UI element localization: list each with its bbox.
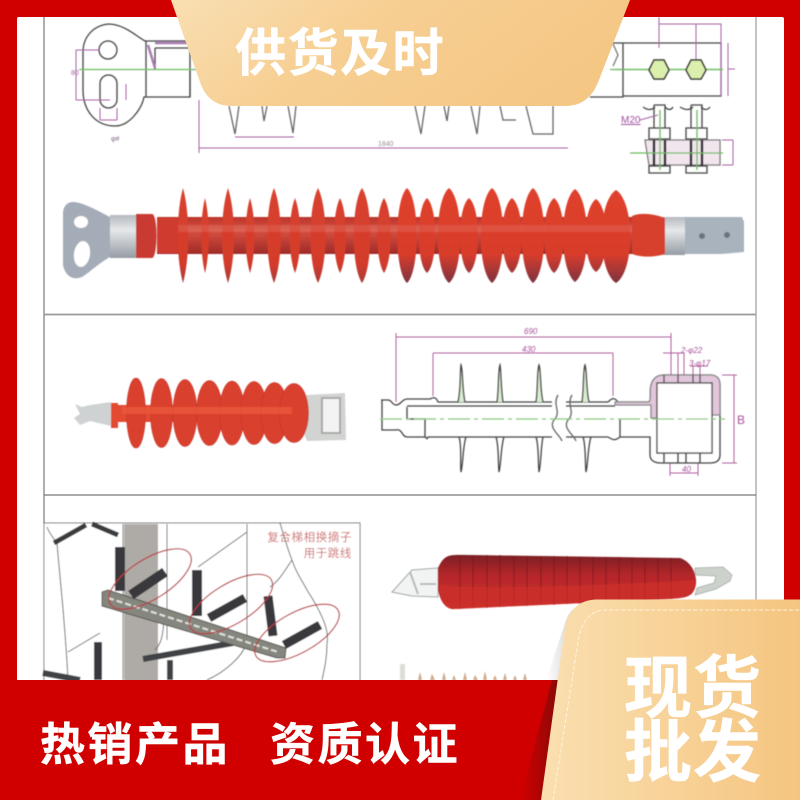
right tab (682, 217, 744, 254)
badge heading line 1: 现货 (624, 633, 762, 732)
corner badge: spot wholesale (541, 600, 800, 800)
rounded sheds, right half (397, 188, 630, 283)
dimension labels: 3-φ17 (689, 359, 711, 368)
technical drawing: middle insulator (380, 327, 745, 476)
footer heading: certification: 资质认证 (270, 708, 460, 773)
partial product photo: tan shed tips (400, 664, 527, 680)
cross arm (102, 590, 286, 658)
red highlight ellipses (100, 537, 348, 673)
drawing: bolt section M20 (621, 105, 733, 173)
photo caption: 用于跳线 (304, 546, 352, 560)
application photo: insulators on pole (43, 523, 360, 688)
footer heading: hot products: 热销产品 (40, 708, 230, 773)
band shadow beside badge (520, 680, 562, 800)
drawing: bolt section M20: M20 (621, 115, 641, 126)
technical drawing: top insulator: φ# (111, 136, 120, 143)
badge drop shadow (546, 606, 590, 680)
technical drawing: top insulator (71, 17, 735, 173)
photo frame (44, 523, 360, 688)
badge heading line 2: 批发 (624, 697, 762, 796)
upper brace (54, 524, 118, 543)
left fitting (74, 402, 111, 426)
insulators (98, 547, 320, 680)
core rod (111, 403, 290, 428)
ribbon heading: 供货及时 (235, 12, 445, 86)
green centre line (380, 418, 725, 420)
drawing: lower shed tips (229, 106, 553, 134)
dimension lines (396, 333, 737, 476)
core highlight (157, 225, 632, 232)
bottom red band (0, 680, 570, 800)
panel rules: sheet grid lines (44, 17, 756, 600)
end collars (136, 214, 156, 258)
cross arm lattice (108, 598, 278, 652)
dimension labels: 690 (524, 327, 538, 336)
right fitting (695, 567, 732, 595)
badge stitching (553, 610, 800, 800)
dimension labels: 2-φ22 (680, 346, 703, 355)
dimension labels: 430 (522, 345, 536, 354)
ribbed body (438, 555, 696, 609)
photo caption: 复合梯相换摘子 (267, 530, 352, 544)
ribs (460, 555, 671, 609)
right fitting (300, 393, 346, 441)
drawing: eye fitting (83, 24, 190, 126)
wires (47, 523, 328, 680)
lower braces (43, 643, 233, 680)
right red edge (784, 17, 800, 680)
dimension labels: B (737, 413, 745, 427)
product photo: short insulator (74, 378, 346, 448)
core highlights (122, 407, 292, 414)
pointed sheds, left half (178, 188, 391, 283)
insulator outline (381, 375, 720, 463)
dimension labels: 40 (682, 465, 691, 474)
sheds (458, 365, 589, 402)
lower shine (440, 580, 695, 609)
technical drawing: top insulator: 80 (71, 70, 79, 77)
concrete pole (124, 524, 158, 688)
top ribbon: delivery (171, 0, 630, 106)
left fitting (392, 568, 438, 597)
core rod (157, 217, 632, 254)
product photo: ribbed insulator (392, 555, 732, 609)
product photo: long insulator (63, 188, 744, 283)
drawing: slotted end fitting (590, 43, 721, 97)
ribbon shape (171, 0, 630, 106)
dimension labels (522, 327, 745, 474)
clevis box (615, 375, 720, 418)
badge shape (541, 600, 800, 800)
eye plate (63, 202, 112, 278)
drawing: centre lines and dimensions (79, 68, 723, 70)
photo caption (267, 530, 352, 560)
sheds (126, 378, 308, 448)
technical drawing: top insulator: 1840 (378, 141, 394, 148)
